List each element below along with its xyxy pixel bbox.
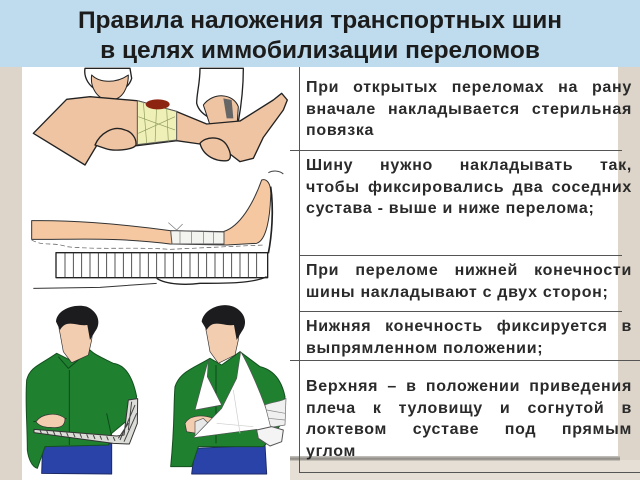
rule 5: upper limb position: Верхняя – в положении приведения	[306, 378, 632, 395]
rule 1: open fractures	[306, 79, 632, 139]
title: Правила наложения транспортных шин	[78, 7, 562, 34]
white text panel	[290, 67, 618, 457]
rule 4: lower limb straight	[306, 318, 632, 356]
rule 3: lower limb both sides	[306, 262, 632, 300]
title	[0, 0, 640, 67]
rule 5: upper limb position	[306, 378, 632, 460]
title: в целях иммобилизации переломов	[100, 37, 540, 64]
rule 5: upper limb position: углом	[306, 442, 356, 460]
beige overlay on right edge	[618, 67, 640, 457]
rule 5: upper limb position: локтевом суставе под прямым	[306, 421, 632, 438]
rule 3: lower limb both sides: шины накладывают с двух сторон;	[306, 284, 609, 300]
rule 5: upper limb position: плеча к туловищу и согнутой в	[306, 400, 632, 416]
rule 2: two joints: Шину нужно накладывать так,	[306, 157, 632, 174]
rule 4: lower limb straight: выпрямленном положении;	[306, 340, 543, 356]
lower shadow strip	[290, 456, 620, 461]
rule 1: open fractures: повязка	[306, 122, 374, 139]
rule 1: open fractures: При открытых переломах на рану	[306, 79, 632, 96]
illustration: leg on straight splint	[32, 171, 283, 288]
lighter strip below panel	[290, 460, 640, 480]
rule 3: lower limb both sides: При переломе нижней конечности	[306, 262, 632, 279]
illustrations panel	[22, 67, 290, 480]
rule 2: two joints: сустава - выше и ниже перелома;	[306, 200, 595, 217]
rule 1: open fractures: вначале накладывается стерильная	[306, 100, 632, 118]
illustration: man with arm splint	[26, 306, 138, 474]
rule 4: lower limb straight: Нижняя конечность фиксируется в	[306, 318, 632, 335]
illustration: bandaging open wound on leg	[33, 68, 287, 165]
rule 2: two joints: чтобы фиксировались два соседних	[306, 178, 632, 196]
illustration: man with arm in sling	[171, 305, 286, 474]
rule 2: two joints	[306, 157, 632, 217]
